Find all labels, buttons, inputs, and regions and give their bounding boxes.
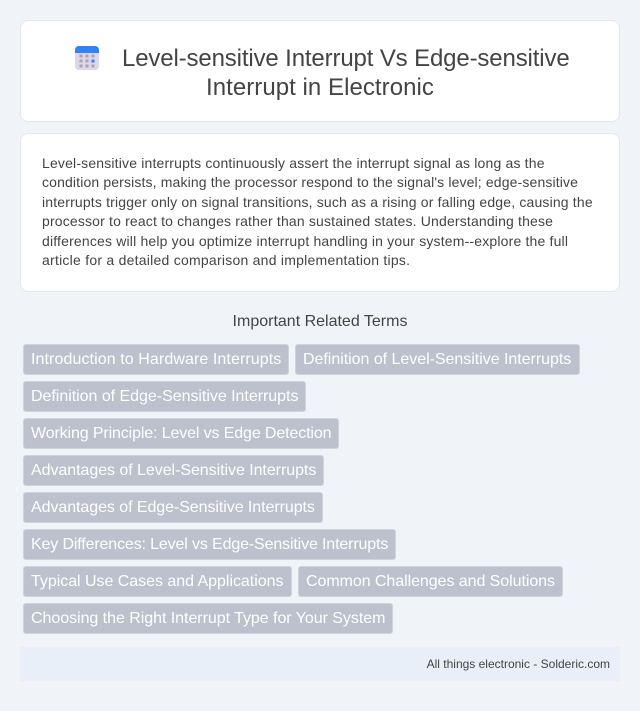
tag: Key Differences: Level vs Edge-Sensitive Interrupts xyxy=(31,536,388,553)
description text: condition persists, making the processor respond to the signal's level; edge-sensitive xyxy=(42,174,578,190)
tag: Definition of Level-Sensitive Interrupts xyxy=(303,351,571,368)
tag xyxy=(23,381,306,412)
icon: calendar xyxy=(75,46,99,70)
title: Interrupt in Electronic xyxy=(206,74,434,101)
title: Level-sensitive Interrupt Vs Edge-sensitive xyxy=(122,45,570,72)
description text: interrupts trigger only on signal transitions, such as a rising or falling edge, causing the xyxy=(42,194,593,210)
tag xyxy=(23,418,339,449)
title xyxy=(122,45,570,101)
tag: Definition of Edge-Sensitive Interrupts xyxy=(31,388,298,405)
tag xyxy=(298,566,563,597)
description text xyxy=(42,155,593,268)
tag: Advantages of Level-Sensitive Interrupts xyxy=(31,462,316,479)
related terms tags xyxy=(23,344,580,634)
footer xyxy=(20,647,620,681)
description text: Level-sensitive interrupts continuously assert the interrupt signal as long as the xyxy=(42,155,545,171)
description panel xyxy=(20,133,620,292)
header panel xyxy=(20,20,620,122)
related terms heading: Important Related Terms xyxy=(233,313,407,330)
tag xyxy=(23,566,292,597)
description text: article for a detailed comparison and implementation tips. xyxy=(42,252,410,268)
tag: Working Principle: Level vs Edge Detection xyxy=(31,425,331,442)
tag xyxy=(23,529,396,560)
tag xyxy=(23,344,289,375)
tag: Common Challenges and Solutions xyxy=(306,573,555,590)
description text: differences will help you optimize interrupt handling in your system--explore the full xyxy=(42,233,568,249)
footer: All things electronic - Solderic.com xyxy=(427,657,610,671)
tag: Choosing the Right Interrupt Type for Your System xyxy=(31,610,385,627)
tag: Advantages of Edge-Sensitive Interrupts xyxy=(31,499,315,516)
tag xyxy=(23,455,324,486)
tag: Typical Use Cases and Applications xyxy=(31,573,283,590)
description text: processor to react to changes rather than sustained states. Understanding these xyxy=(42,213,553,229)
tag xyxy=(23,603,393,634)
tag xyxy=(23,492,323,523)
tag: Introduction to Hardware Interrupts xyxy=(31,351,281,368)
tag xyxy=(295,344,580,375)
